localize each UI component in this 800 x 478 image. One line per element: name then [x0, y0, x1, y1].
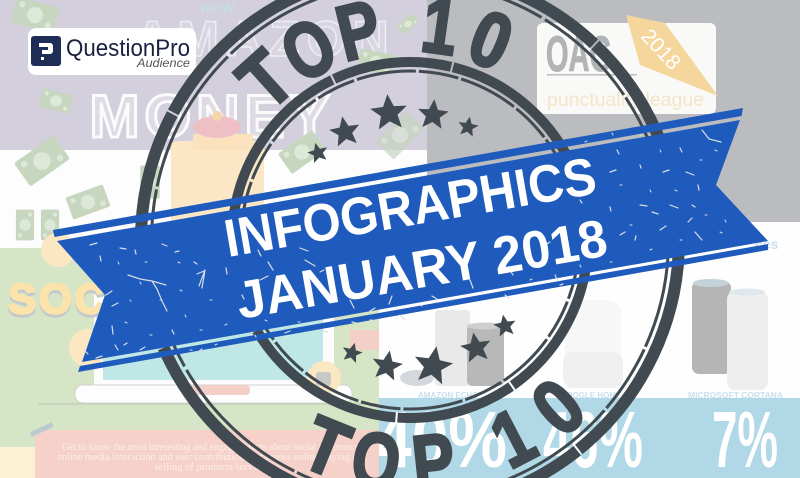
- icon: money bills: [10, 0, 425, 240]
- heading: HOW: HOW: [201, 1, 235, 16]
- figures: market share percentages: [375, 395, 778, 478]
- panel: social commerce infographic background: [0, 233, 379, 478]
- heading: MONEY: MONEY: [89, 83, 335, 150]
- text block: description panel: online media interaction and user contributions, strategies online buying and: [57, 452, 368, 463]
- icon: lower stars: [340, 313, 518, 385]
- card: OAG punctuality league: OAG: [546, 26, 612, 82]
- panel: Amazon infographic background: [0, 0, 427, 248]
- text block: description panel: Get to know the most interesting and engaging facts about social commerce,: [62, 442, 362, 453]
- text block: description panel: [35, 430, 379, 478]
- heading: AMAZON: AMAZON: [134, 11, 396, 67]
- text: TOP 10 upper arc: T: [222, 34, 310, 126]
- logo: QuestionPro Audience: [28, 28, 196, 75]
- ribbon: 2018: [626, 15, 718, 96]
- ribbon: 2018: 2018: [636, 25, 685, 75]
- text: TOP 10 upper arc: [222, 0, 524, 126]
- icon: upper stars: [305, 93, 480, 164]
- text block: description panel: selling of products/services: [155, 462, 269, 473]
- heading fragment: SOC: SOC: [8, 278, 108, 325]
- text: TOP 10 upper arc: O: [267, 0, 350, 99]
- card: OAG punctuality league: punctuality league: [547, 90, 704, 111]
- labels: speaker names: GOOGLE HOME: [560, 391, 622, 400]
- illustration: Amazon Echo: [400, 310, 504, 386]
- text: TOP 10 lower arc: 0: [516, 362, 601, 452]
- ring: outer circle: [141, 0, 679, 478]
- logo: QuestionPro Audience: QuestionPro: [66, 35, 190, 62]
- icon: QuestionPro P: [31, 36, 61, 66]
- icon: social bubbles: [41, 233, 341, 395]
- panel: smart speakers infographic background: [375, 222, 800, 478]
- text: TOP 10 lower arc: [291, 362, 601, 478]
- banner: blue ribbon: [53, 108, 768, 372]
- panel: OAG infographic background: [427, 0, 800, 222]
- labels: speaker names: MICROSOFT CORTANA: [688, 391, 783, 400]
- title: INFOGRAPHICS JANUARY 2018: JANUARY 2018: [232, 209, 612, 331]
- illustration: laptop: [38, 240, 378, 405]
- illustration: Google Home: [563, 300, 623, 388]
- title: INFOGRAPHICS JANUARY 2018: INFOGRAPHICS: [220, 147, 601, 269]
- heading fragment: devices: ces: [755, 236, 779, 252]
- illustration: jar: [171, 111, 264, 226]
- card: OAG punctuality league: [537, 15, 718, 114]
- logo: QuestionPro Audience: Audience: [136, 58, 190, 70]
- ring: inner circle: [232, 62, 588, 418]
- distress marks: [84, 130, 726, 358]
- stamp: rings, stars and TOP 10 text: [141, 0, 679, 478]
- labels: speaker names: AMAZON ECHO: [418, 391, 478, 400]
- illustration: Microsoft Cortana: [692, 279, 768, 390]
- title: INFOGRAPHICS JANUARY 2018: [220, 147, 612, 331]
- labels: speaker names: [418, 391, 783, 400]
- heading fragment: SOC: SOC: [8, 275, 108, 322]
